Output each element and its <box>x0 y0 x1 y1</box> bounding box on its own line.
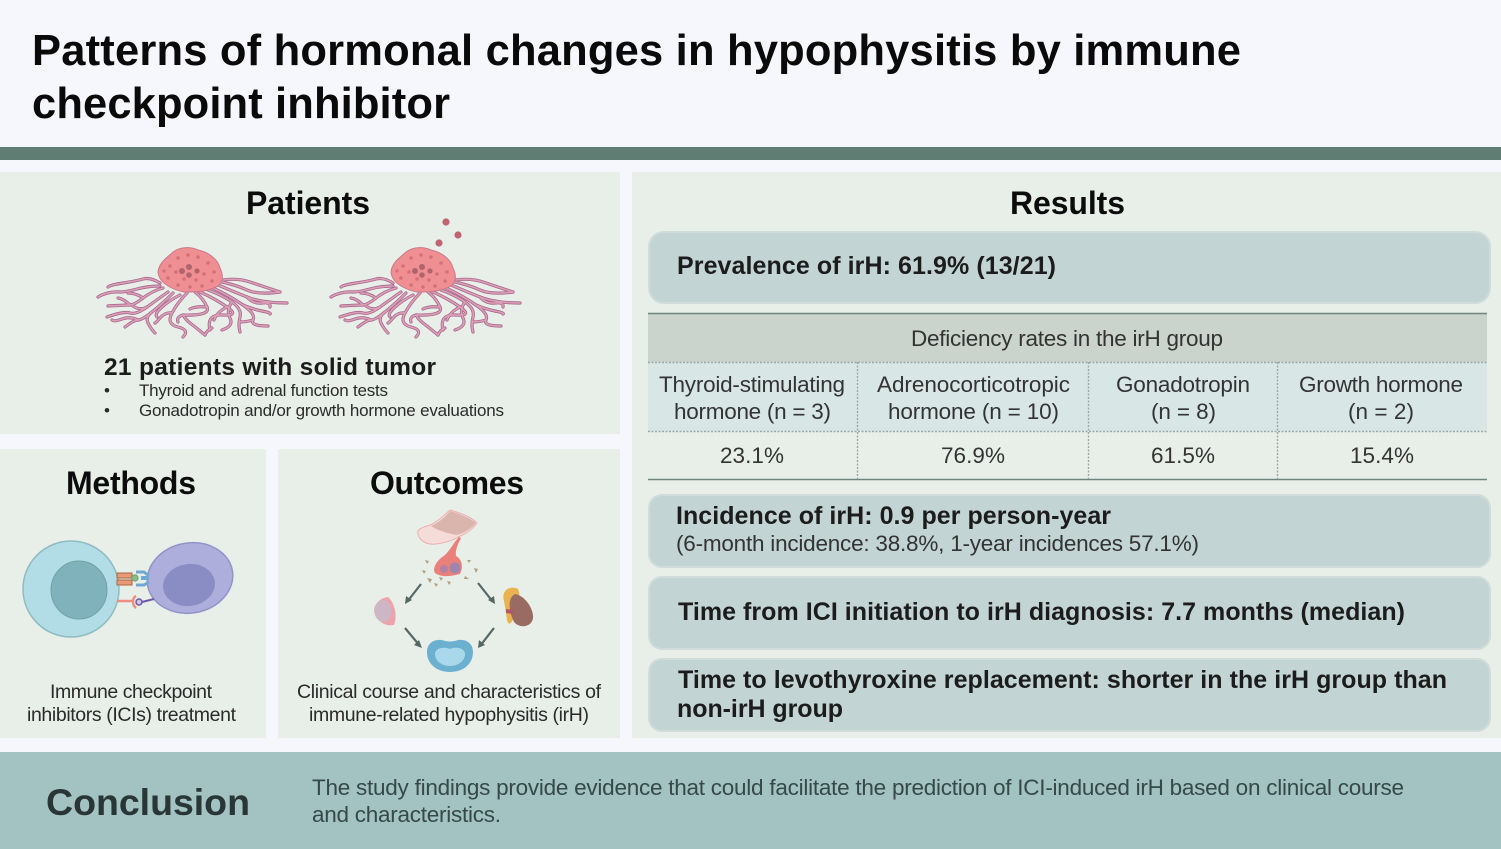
text: conclusion statement: and characteristics. <box>312 802 501 827</box>
panel: conclusion <box>0 752 1501 849</box>
list: evaluations: Gonadotropin and/or growth hormone evaluations <box>139 401 504 420</box>
panel: results <box>632 172 1501 738</box>
text: conclusion statement <box>312 775 1404 827</box>
header divider bar <box>0 147 1501 160</box>
text: patient count: 21 patients with solid tumor <box>104 354 436 381</box>
text: methods description: Immune checkpoint <box>50 681 213 703</box>
result: prevalence <box>649 232 1490 303</box>
text: outcomes description: Clinical course and characteristics of <box>297 681 602 703</box>
title: Patterns of hormonal changes in hypophysitis by immune <box>32 27 1241 75</box>
icon: arrows between glands <box>405 583 495 648</box>
column: growth hormone: (n = 2) <box>1348 399 1414 424</box>
text: conclusion statement: The study findings provide evidence that could facilitate the prediction of ICI-induced irH based on clinical course <box>312 775 1404 800</box>
result: prevalence: Prevalence of irH: 61.9% (13/21) <box>677 252 1056 280</box>
list: evaluations: • <box>104 381 110 400</box>
list: evaluations <box>104 381 504 420</box>
table title: Deficiency rates in the irH group <box>911 326 1223 351</box>
column: adrenocorticotropic hormone: hormone (n = 10) <box>888 399 1059 424</box>
column: growth hormone: 15.4% <box>1350 443 1414 468</box>
icon: metastasizing solid tumor <box>331 218 520 337</box>
list: evaluations: • <box>104 401 110 420</box>
list: evaluations: Thyroid and adrenal function tests <box>139 381 388 400</box>
text: outcomes description <box>297 681 602 726</box>
panel: patients <box>0 172 620 434</box>
column: gonadotropin: Gonadotropin <box>1116 372 1250 397</box>
column: gonadotropin: 61.5% <box>1151 443 1215 468</box>
result: incidence: Incidence of irH: 0.9 per person-year <box>676 502 1111 530</box>
heading: conclusion: Conclusion <box>46 781 250 823</box>
column: thyroid-stimulating hormone: hormone (n = 3) <box>674 399 831 424</box>
text: outcomes description: immune-related hypophysitis (irH) <box>309 704 589 726</box>
heading: patients: Patients <box>246 185 370 221</box>
column: gonadotropin <box>1116 372 1250 468</box>
table: deficiency rates <box>648 314 1487 480</box>
column: adrenocorticotropic hormone: 76.9% <box>941 443 1005 468</box>
column: thyroid-stimulating hormone <box>659 372 845 468</box>
column: thyroid-stimulating hormone: 23.1% <box>720 443 784 468</box>
icon: thyroid gland <box>374 597 396 625</box>
icon: primary solid tumor <box>98 248 287 337</box>
panel: outcomes <box>278 449 620 738</box>
result: levothyroxine replacement: non-irH group <box>677 695 843 723</box>
result: time to diagnosis <box>649 577 1490 649</box>
text: methods description: inhibitors (ICIs) treatment <box>27 704 237 726</box>
result: levothyroxine replacement: Time to levothyroxine replacement: shorter in the irH group than <box>678 666 1447 694</box>
icon: T cell and tumor cell checkpoint binding <box>23 536 238 637</box>
icon: gonad <box>427 640 473 672</box>
column: growth hormone <box>1299 372 1463 468</box>
column: gonadotropin: (n = 8) <box>1151 399 1216 424</box>
title <box>32 27 1241 128</box>
heading: outcomes: Outcomes <box>370 465 524 501</box>
column: growth hormone: Growth hormone <box>1299 372 1463 397</box>
heading: methods: Methods <box>66 465 196 501</box>
column: adrenocorticotropic hormone: Adrenocorticotropic <box>877 372 1070 397</box>
result: levothyroxine replacement <box>649 659 1490 731</box>
column: thyroid-stimulating hormone: Thyroid-stimulating <box>659 372 845 397</box>
column: adrenocorticotropic hormone <box>877 372 1070 468</box>
panel: methods <box>0 449 266 738</box>
icon: adrenal and kidney <box>503 588 533 626</box>
result: incidence: (6-month incidence: 38.8%, 1-year incidences 57.1%) <box>676 531 1199 556</box>
icon: hypothalamus-pituitary axis <box>418 510 478 587</box>
heading: results: Results <box>1010 185 1125 221</box>
text: methods description <box>27 681 237 726</box>
result: time to diagnosis: Time from ICI initiation to irH diagnosis: 7.7 months (median) <box>678 598 1405 626</box>
title: checkpoint inhibitor <box>32 80 450 128</box>
result: incidence <box>649 495 1490 567</box>
